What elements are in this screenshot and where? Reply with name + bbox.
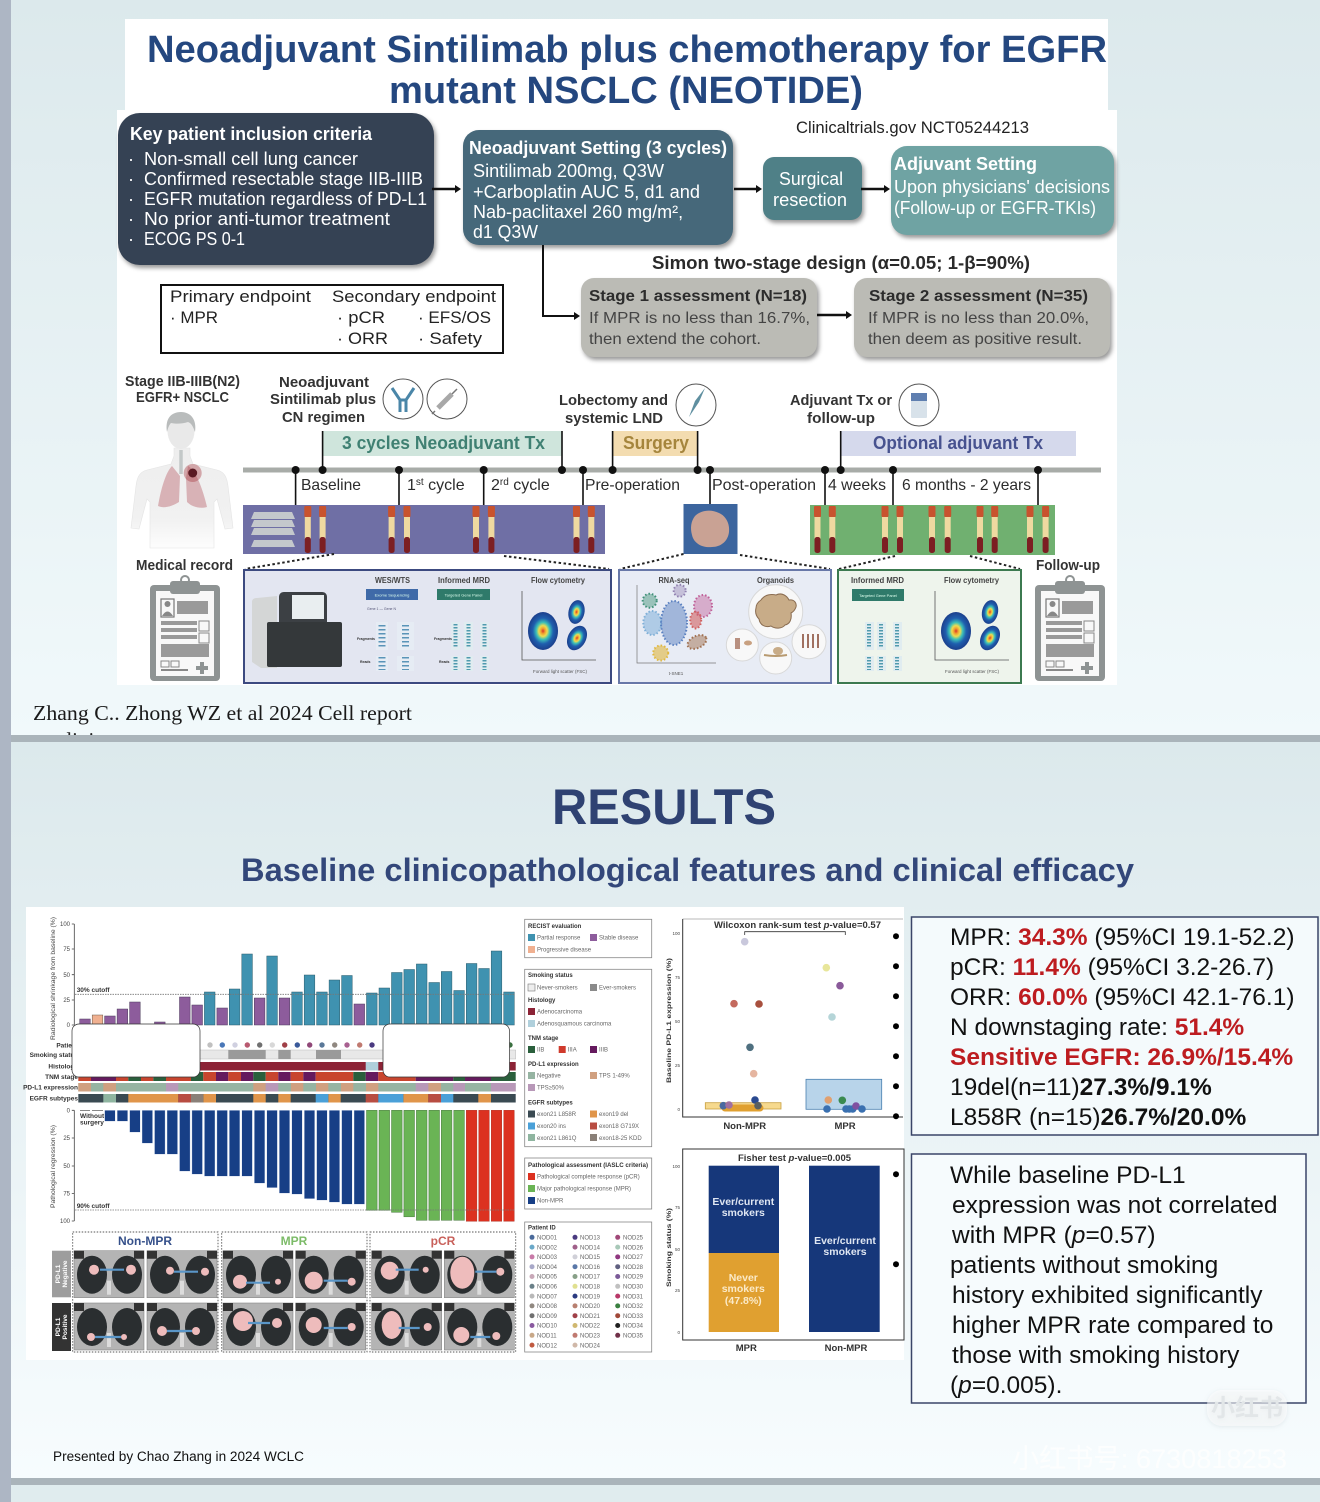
sample band: tumor tissue xyxy=(684,504,738,554)
chart: smoking status by mpr xyxy=(666,1149,904,1354)
legend: patient id: NOD35 xyxy=(623,1334,644,1340)
legend: pathological assessment: Major pathological response (MPR) xyxy=(537,1186,631,1192)
legend: clinical annotations: TPS 1-49% xyxy=(599,1074,630,1080)
white figure panel xyxy=(26,907,904,1360)
panel: endpoints: · EFS/OS xyxy=(418,308,491,327)
timeline labels: 6 months - 2 years xyxy=(902,477,1031,494)
panel: stage 2 assessment: then deem as positive result. xyxy=(868,331,1082,348)
chart: baseline pd-l1 expression by mpr: 75 xyxy=(675,975,680,980)
panel: efficacy results: pCR: 11.4% (95%CI 3.2-26.7) xyxy=(950,954,1274,981)
watermark id: 小红书号: 6730818253 xyxy=(1012,1444,1287,1474)
informed mrd assay: Reads xyxy=(439,660,450,664)
flow cytometry plot xyxy=(522,576,596,674)
legend: patient id: NOD26 xyxy=(623,1245,644,1251)
chart: clinical annotation rows: TNM stage xyxy=(45,1074,78,1081)
panel: follow-up assays: Informed MRD xyxy=(851,576,904,585)
legend: patient id: NOD12 xyxy=(537,1343,558,1349)
panel: surgical resection: resection xyxy=(773,190,847,210)
chart: radiological shrinkage waterfall: 0 xyxy=(67,1023,71,1029)
timeline xyxy=(243,431,1101,505)
icon: antibody xyxy=(383,379,423,419)
redaction box right xyxy=(383,1024,510,1077)
clipped citation second line: clinic xyxy=(57,728,104,752)
icon: sequencer xyxy=(252,592,342,668)
icon: follow-up clipboard xyxy=(1035,576,1105,681)
chart: clinical annotation rows: Patient xyxy=(56,1042,79,1050)
legend: pathological assessment xyxy=(525,1158,652,1209)
panel: key patient inclusion criteria: · xyxy=(128,209,134,229)
panel: efficacy results xyxy=(912,917,1318,1135)
heading: simon two-stage design: Simon two-stage design (α=0.05; 1-β=90%) xyxy=(652,253,1030,273)
neoadjuvant regimen label xyxy=(270,374,376,426)
chart: clinical annotation rows: PD-L1 expression xyxy=(23,1084,78,1092)
legend: patient id: NOD06 xyxy=(537,1284,558,1290)
panel: stage 1 assessment: Stage 1 assessment (N=18) xyxy=(589,288,807,305)
timeline labels: cycle xyxy=(424,477,465,494)
panel: efficacy results: L858R (n=15)26.7%/20.0% xyxy=(950,1104,1246,1131)
legend: patient id: NOD19 xyxy=(580,1294,601,1300)
panel: endpoints: · pCR xyxy=(337,308,385,327)
chart: baseline pd-l1 expression by mpr: 0 xyxy=(677,1107,680,1112)
icon: scalpel xyxy=(676,384,716,426)
neoadjuvant regimen label: Neoadjuvant xyxy=(279,374,369,391)
chart: radiological shrinkage waterfall: Radiological shrinkage from baseline (%) xyxy=(51,917,57,1040)
chart: smoking status by mpr: Never xyxy=(729,1272,758,1284)
panel: neoadjuvant setting: +Carboplatin AUC 5, d1 and xyxy=(473,182,700,202)
pd-l1 positive label: PD-L1 xyxy=(55,1317,62,1336)
panel: key patient inclusion criteria: · xyxy=(128,149,134,169)
box non-mpr xyxy=(705,1103,781,1109)
white study design panel xyxy=(117,110,1117,685)
timeline labels: Post-operation xyxy=(712,477,816,494)
flow cytometry plot follow-up xyxy=(935,591,1009,674)
legend: clinical annotations: exon18 G719X xyxy=(599,1124,639,1130)
legend: clinical annotations: IIIB xyxy=(599,1048,608,1054)
tsne clusters xyxy=(643,585,712,660)
band: surgery xyxy=(613,431,698,456)
arrow: surgery to adjuvant xyxy=(861,185,890,193)
panel: endpoints: · ORR xyxy=(337,329,388,348)
legend: pathological assessment: Pathological assessment (IASLC criteria) xyxy=(528,1163,648,1169)
panel: follow-up assays: Flow cytometry xyxy=(944,576,1000,585)
panel: efficacy results: ORR: 60.0% (95%CI 42.1-76.1) xyxy=(950,984,1295,1011)
panel: pd-l1 and smoking conclusions: with MPR (p=0.57) xyxy=(951,1222,1156,1249)
panel: key patient inclusion criteria: Confirmed resectable stage IIB-IIIB xyxy=(144,169,423,189)
chart: radiological shrinkage waterfall: 25 xyxy=(63,998,71,1004)
chart: clinical annotation rows: EGFR subtypes xyxy=(30,1096,78,1102)
legend: clinical annotations xyxy=(525,969,652,1147)
panel: stage 1 assessment: If MPR is no less than 16.7%, xyxy=(589,310,810,327)
chart: smoking status by mpr: 50 xyxy=(675,1247,680,1252)
chart: clinical annotation rows: Histology xyxy=(48,1064,78,1070)
legend: patient id: NOD27 xyxy=(623,1255,644,1261)
legend: clinical annotations: EGFR subtypes xyxy=(528,1100,573,1106)
arrow: neoadjuvant to surgery xyxy=(734,185,762,193)
panel: tumor tissue assays: RNA-seq xyxy=(658,576,690,585)
panel: tumor tissue assays: t-SNE1 xyxy=(669,671,684,676)
panel: key patient inclusion criteria: Non-small cell lung cancer xyxy=(144,149,358,169)
panel: endpoints: Secondary endpoint xyxy=(332,287,496,306)
panel: endpoints: Primary endpoint xyxy=(170,287,311,306)
chart: baseline pd-l1 expression by mpr: Wilcoxon rank-sum test p-value=0.57 xyxy=(714,920,881,930)
chart: pathological regression waterfall: 100 xyxy=(60,1219,71,1225)
panel: adjuvant setting: Adjuvant Setting xyxy=(894,154,1037,174)
panel: stage 1 assessment xyxy=(581,278,817,357)
legend: clinical annotations: Adenocarcinoma xyxy=(537,1010,583,1016)
chart: pathological regression waterfall: Pathological regression (%) xyxy=(51,1125,57,1208)
legend: pathological assessment: Non-MPR xyxy=(537,1198,564,1204)
arrow: stage 1 to stage 2 xyxy=(817,311,852,319)
top slide background xyxy=(0,0,1320,735)
chart: smoking status by mpr: Smoking status (%) xyxy=(666,1208,673,1287)
legend: patient id: NOD10 xyxy=(537,1324,558,1330)
chart: smoking status by mpr: Ever/current xyxy=(814,1235,876,1247)
panel: follow-up assays xyxy=(838,570,1021,683)
chart: smoking status by mpr: smokers xyxy=(722,1283,765,1295)
panel: neoadjuvant setting xyxy=(463,130,733,245)
panel: pd-l1 and smoking conclusions: higher MPR rate compared to xyxy=(952,1312,1273,1339)
panel: surgical resection xyxy=(763,157,862,220)
pd-l1 negative label: PD-L1 xyxy=(55,1264,62,1283)
chart: clinical annotation rows: Smoking status xyxy=(30,1052,78,1059)
legend: clinical annotations: exon20 ins xyxy=(537,1124,566,1130)
legend: clinical annotations: TNM stage xyxy=(528,1036,559,1042)
panel: key patient inclusion criteria xyxy=(118,113,434,265)
title panel xyxy=(125,19,1108,112)
timeline labels: st xyxy=(416,477,424,488)
panel: key patient inclusion criteria: · xyxy=(128,189,134,209)
chart: pathological regression waterfall: surgery xyxy=(80,1120,104,1126)
timeline labels: 2 xyxy=(491,477,500,494)
chart: smoking status by mpr: MPR xyxy=(736,1343,757,1354)
legend: patient id: NOD08 xyxy=(537,1304,558,1310)
follow-up label: Follow-up xyxy=(1036,557,1100,574)
legend: patient id: NOD14 xyxy=(580,1245,601,1251)
timeline labels: 1 xyxy=(407,477,416,494)
flow cytometry plot: Forward light scatter (FSC) xyxy=(533,669,588,674)
flow cytometry plot: Flow cytometry xyxy=(531,576,585,585)
chart: baseline pd-l1 expression by mpr: 100 xyxy=(672,931,680,936)
chart: radiological shrinkage waterfall: 100 xyxy=(60,922,71,928)
surgery label xyxy=(559,392,668,427)
panel: baseline sample assays xyxy=(244,570,611,683)
chart: smoking status by mpr: Fisher test p-value=0.005 xyxy=(738,1153,851,1163)
panel: stage 1 assessment: then extend the cohort. xyxy=(589,331,761,348)
panel: pd-l1 and smoking conclusions: those with smoking history xyxy=(952,1342,1240,1369)
results heading: RESULTS xyxy=(552,779,776,835)
presenter credit: Presented by Chao Zhang in 2024 WCLC xyxy=(53,1449,304,1464)
chart: baseline pd-l1 expression by mpr xyxy=(666,919,903,1132)
panel: adjuvant setting xyxy=(891,146,1114,235)
legend: patient id: NOD33 xyxy=(623,1314,644,1320)
panel: efficacy results: 19del(n=11)27.3%/9.1% xyxy=(950,1074,1212,1101)
band: 3 cycles neoadjuvant tx xyxy=(323,431,562,456)
legend: patient id: NOD15 xyxy=(580,1255,601,1261)
legend: patient id: NOD01 xyxy=(537,1236,558,1242)
legend: clinical annotations: exon19 del xyxy=(599,1112,628,1118)
panel: ct image comparison xyxy=(52,1232,516,1352)
legend: recist evaluation: Progressive disease xyxy=(537,948,592,954)
bottom slide background xyxy=(0,742,1320,1478)
panel: adjuvant setting: Upon physicians' decisions xyxy=(894,177,1110,197)
panel: endpoints xyxy=(161,285,503,353)
panel: ct image comparison: pCR xyxy=(431,1234,456,1248)
legend: recist evaluation: Stable disease xyxy=(599,936,639,942)
medical record label: Medical record xyxy=(136,557,233,574)
chart: baseline pd-l1 expression by mpr: Baseline PD-L1 expression (%) xyxy=(666,958,673,1083)
organoid diagrams xyxy=(726,585,826,674)
panel: stage 2 assessment: If MPR is no less than 20.0%, xyxy=(868,310,1089,327)
pd-l1 negative label xyxy=(52,1251,71,1297)
legend: clinical annotations: Never-smokers xyxy=(537,986,578,992)
legend: patient id: NOD25 xyxy=(623,1236,644,1242)
wes/wts assay: WES/WTS xyxy=(375,576,411,585)
legend: patient id: NOD28 xyxy=(623,1265,644,1271)
legend: clinical annotations: Negative xyxy=(537,1074,561,1080)
panel: adjuvant setting: (Follow-up or EGFR-TKIs) xyxy=(894,198,1096,218)
trial registration: Clinicaltrials.gov NCT05244213 xyxy=(796,118,1029,137)
panel: key patient inclusion criteria: Key patient inclusion criteria xyxy=(130,124,373,144)
panel: tumor tissue assays xyxy=(619,570,831,683)
legend: clinical annotations: exon18-25 KDD xyxy=(599,1136,642,1142)
legend: clinical annotations: Ever-smokers xyxy=(599,986,636,992)
band: optional adjuvant tx xyxy=(841,431,1076,456)
panel: pd-l1 and smoking conclusions: patients without smoking xyxy=(950,1252,1218,1279)
adjuvant label xyxy=(790,392,892,427)
watermark logo: 小红书 xyxy=(1211,1388,1283,1423)
chart: smoking status by mpr: Ever/current xyxy=(712,1196,775,1208)
informed mrd assay: Targeted Gene Panel xyxy=(445,592,483,598)
pd-l1 positive label: Positive xyxy=(62,1314,69,1339)
arrow: neoadjuvant to stage 1 xyxy=(543,245,580,320)
chart: smoking status by mpr: smokers xyxy=(722,1207,765,1219)
timeline labels xyxy=(301,477,1031,494)
legend: patient id: NOD07 xyxy=(537,1294,558,1300)
chart: smoking status by mpr: 25 xyxy=(675,1288,680,1293)
chart: pathological regression waterfall xyxy=(51,1108,515,1225)
panel: key patient inclusion criteria: · xyxy=(128,229,134,249)
legend: patient id: NOD30 xyxy=(623,1284,644,1290)
panel: neoadjuvant setting: d1 Q3W xyxy=(473,222,538,242)
panel: ct image comparison: MPR xyxy=(281,1234,308,1248)
panel: pd-l1 and smoking conclusions: While baseline PD-L1 xyxy=(950,1162,1186,1189)
results subheading: Baseline clinicopathological features and clinical efficacy xyxy=(241,852,1134,888)
legend: patient id: NOD32 xyxy=(623,1304,644,1310)
panel: surgical resection: Surgical xyxy=(779,169,843,189)
band: optional adjuvant tx: Optional adjuvant Tx xyxy=(873,433,1043,453)
patient population label: EGFR+ NSCLC xyxy=(136,389,229,406)
icon: syringe xyxy=(427,379,467,419)
pd-l1 negative label: Negative xyxy=(62,1260,69,1288)
citation: Zhang C.. Zhong WZ et al 2024 Cell report xyxy=(33,701,412,725)
legend: patient id: Patient ID xyxy=(528,1226,556,1232)
sample band: blood follow-up xyxy=(810,505,1055,555)
chart: pathological regression waterfall: 50 xyxy=(63,1164,71,1170)
legend: clinical annotations: IIB xyxy=(537,1048,544,1054)
panel: stage 2 assessment xyxy=(854,278,1110,357)
chart: baseline pd-l1 expression by mpr: MPR xyxy=(834,1121,856,1132)
legend: patient id: NOD04 xyxy=(537,1265,558,1271)
icon: patient with lungs xyxy=(131,412,233,548)
chart: pathological regression waterfall: 75 xyxy=(63,1192,71,1198)
adjuvant label: follow-up xyxy=(807,410,875,427)
chart: pathological regression waterfall: 90% cutoff xyxy=(77,1203,110,1210)
legend: patient id: NOD23 xyxy=(580,1334,601,1340)
panel: key patient inclusion criteria: EGFR mutation regardless of PD-L1 xyxy=(144,189,427,209)
legend: patient id: NOD21 xyxy=(580,1314,601,1320)
arrow: criteria to neoadjuvant xyxy=(432,185,461,193)
legend: clinical annotations: exon21 L858R xyxy=(537,1112,577,1118)
panel: ct image comparison: Non-MPR xyxy=(118,1234,172,1248)
chart: baseline pd-l1 expression by mpr: 50 xyxy=(675,1019,680,1024)
panel: pd-l1 and smoking conclusions xyxy=(912,1154,1306,1403)
panel: endpoints: · Safety xyxy=(418,329,483,348)
legend: clinical annotations: exon21 L861Q xyxy=(537,1136,577,1142)
informed mrd assay: Fragments xyxy=(434,637,452,641)
chart: radiological shrinkage waterfall: 30% cutoff xyxy=(77,987,110,994)
title: Neoadjuvant Sintilimab plus chemotherapy for EGFR xyxy=(147,29,1107,71)
icon: medicine bottle xyxy=(899,384,939,426)
timeline labels: cycle xyxy=(509,477,550,494)
chart: baseline pd-l1 expression by mpr: 25 xyxy=(675,1063,680,1068)
adjuvant label: Adjuvant Tx or xyxy=(790,392,892,409)
legend: recist evaluation xyxy=(525,919,652,958)
legend: clinical annotations: TPS≥50% xyxy=(537,1086,565,1092)
chart: smoking status by mpr: 100 xyxy=(672,1164,680,1169)
panel: follow-up assays: Targeted Gene Panel xyxy=(859,593,897,598)
legend: patient id: NOD29 xyxy=(623,1275,644,1281)
panel: tumor tissue assays: Organoids xyxy=(757,576,794,585)
redaction box left xyxy=(72,1024,200,1077)
wes/wts assay: Exome Sequencing xyxy=(375,592,409,598)
chart: baseline pd-l1 expression by mpr: Non-MPR xyxy=(723,1121,766,1132)
legend: patient id: NOD31 xyxy=(623,1294,644,1300)
patient population label xyxy=(125,373,240,406)
panel: key patient inclusion criteria: ECOG PS 0-1 xyxy=(144,229,245,249)
wes/wts assay: Reads xyxy=(360,660,371,664)
legend: recist evaluation: RECIST evaluation xyxy=(528,924,582,930)
legend: patient id: NOD16 xyxy=(580,1265,601,1271)
neoadjuvant regimen label: Sintilimab plus xyxy=(270,391,376,408)
title: mutant NSCLC (NEOTIDE) xyxy=(389,70,863,112)
legend: patient id: NOD11 xyxy=(537,1334,557,1340)
legend: clinical annotations: Adenosquamous carcinoma xyxy=(537,1022,612,1028)
timeline labels: Pre-operation xyxy=(585,477,680,494)
legend: patient id: NOD17 xyxy=(580,1275,601,1281)
title xyxy=(147,29,1107,112)
chart: radiological shrinkage waterfall xyxy=(51,917,515,1040)
chart: pathological regression waterfall: Without xyxy=(80,1113,105,1120)
chart: smoking status by mpr: (47.8%) xyxy=(725,1295,762,1307)
legend: clinical annotations: Smoking status xyxy=(528,973,573,979)
chart: smoking status by mpr: 75 xyxy=(675,1205,680,1210)
panel: key patient inclusion criteria: No prior anti-tumor treatment xyxy=(144,209,390,229)
chart: pathological regression waterfall: 25 xyxy=(63,1136,71,1142)
box mpr xyxy=(806,1079,882,1109)
panel: pd-l1 and smoking conclusions: history exhibited significantly xyxy=(952,1282,1263,1309)
legend: patient id: NOD09 xyxy=(537,1314,558,1320)
legend: patient id: NOD24 xyxy=(580,1343,601,1349)
legend: pathological assessment: Pathological complete response (pCR) xyxy=(537,1174,640,1180)
chart: radiological shrinkage waterfall: 75 xyxy=(63,947,71,953)
flow cytometry plot follow-up: Forward light scatter (FSC) xyxy=(945,669,1000,674)
panel: stage 2 assessment: Stage 2 assessment (N=35) xyxy=(869,288,1088,305)
wes/wts assay: Fragments xyxy=(357,637,375,641)
legend: patient id: NOD22 xyxy=(580,1324,601,1330)
legend: clinical annotations: Histology xyxy=(528,998,556,1004)
surgery label: systemic LND xyxy=(565,410,663,427)
surgery label: Lobectomy and xyxy=(559,392,668,409)
timeline labels: rd xyxy=(500,477,509,488)
legend: patient id: NOD20 xyxy=(580,1304,601,1310)
legend: recist evaluation: Partial response xyxy=(537,936,581,942)
timeline labels: Baseline xyxy=(301,477,361,494)
legend: patient id: NOD18 xyxy=(580,1284,601,1290)
sample band: blood and slides baseline to pre-operation xyxy=(243,505,605,554)
neoadjuvant regimen label: CN regimen xyxy=(282,409,365,426)
chart: smoking status by mpr: Non-MPR xyxy=(825,1343,868,1354)
legend: clinical annotations: IIIA xyxy=(568,1048,577,1054)
panel: endpoints: · MPR xyxy=(170,308,218,327)
legend: patient id: NOD34 xyxy=(623,1324,644,1330)
panel: neoadjuvant setting: Nab-paclitaxel 260 mg/m², xyxy=(473,202,683,222)
legend: patient id: NOD02 xyxy=(537,1245,558,1251)
band: 3 cycles neoadjuvant tx: 3 cycles Neoadjuvant Tx xyxy=(342,433,545,453)
informed mrd assay xyxy=(434,576,490,671)
band: surgery: Surgery xyxy=(623,433,689,453)
legend: clinical annotations: PD-L1 expression xyxy=(528,1062,579,1068)
legend: patient id: NOD13 xyxy=(580,1236,601,1242)
legend: patient id xyxy=(525,1222,652,1352)
chart: smoking status by mpr: 0 xyxy=(677,1330,680,1335)
wes/wts assay: Gene 1 — Gene N xyxy=(367,607,396,611)
panel: efficacy results: N downstaging rate: 51.4% xyxy=(950,1014,1244,1041)
bullets beside charts xyxy=(893,933,899,1267)
pd-l1 positive label xyxy=(52,1303,71,1351)
informed mrd assay: Informed MRD xyxy=(438,576,490,585)
chart: clinical annotation rows xyxy=(23,1042,516,1102)
panel: key patient inclusion criteria: · xyxy=(128,169,134,189)
legend: patient id: NOD05 xyxy=(537,1275,558,1281)
chart: radiological shrinkage waterfall: 50 xyxy=(63,973,71,979)
panel: neoadjuvant setting: Sintilimab 200mg, Q3W xyxy=(473,161,664,181)
panel: pd-l1 and smoking conclusions: expression was not correlated xyxy=(952,1192,1277,1219)
panel: neoadjuvant setting: Neoadjuvant Setting (3 cycles) xyxy=(469,138,727,158)
panel: pd-l1 and smoking conclusions: (p=0.005). xyxy=(950,1372,1062,1399)
wes/wts assay xyxy=(357,576,418,671)
icon: medical record clipboard xyxy=(150,576,220,681)
panel: efficacy results: Sensitive EGFR: 26.9%/15.4% xyxy=(950,1044,1293,1071)
patient population label: Stage IIB-IIIB(N2) xyxy=(125,373,240,390)
chart: pathological regression waterfall: 0 xyxy=(67,1108,71,1114)
timeline labels: 4 weeks xyxy=(828,477,886,494)
legend: patient id: NOD03 xyxy=(537,1255,558,1261)
panel: efficacy results: MPR: 34.3% (95%CI 19.1-52.2) xyxy=(950,924,1295,951)
chart: smoking status by mpr: smokers xyxy=(823,1246,867,1258)
